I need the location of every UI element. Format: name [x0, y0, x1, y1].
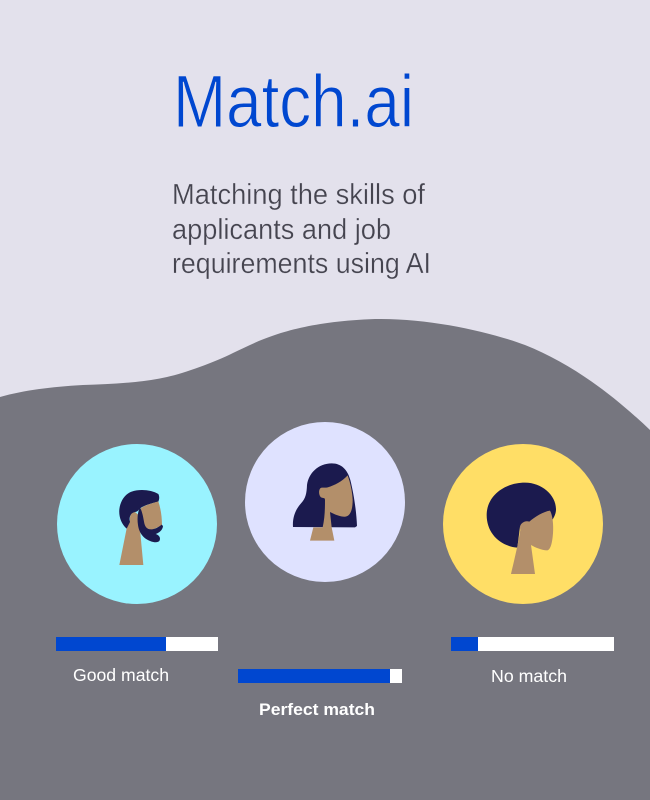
circle: lavender [245, 422, 405, 582]
panel: grey wave background [0, 319, 650, 800]
applicant: good match [57, 444, 217, 604]
label: no match: No match [491, 666, 567, 686]
icon: person with afro [487, 483, 556, 574]
progress bar: perfect match [238, 669, 402, 683]
circle: cyan [57, 444, 217, 604]
label: good match: Good match [73, 665, 169, 685]
icon: man with beard [119, 490, 163, 565]
progress bar: good match [56, 637, 218, 651]
applicant: perfect match [245, 422, 405, 582]
progress bar: no match [451, 637, 614, 651]
title: Match.ai [173, 60, 414, 143]
subtitle: applicants and job [172, 214, 391, 246]
subtitle: requirements using AI [172, 248, 431, 280]
circle: yellow [443, 444, 603, 604]
label: perfect match: Perfect match [259, 700, 375, 719]
applicant: no match [443, 444, 603, 604]
subtitle: Matching the skills of [172, 179, 425, 211]
icon: woman with long hair [293, 463, 357, 541]
subtitle [172, 179, 431, 280]
